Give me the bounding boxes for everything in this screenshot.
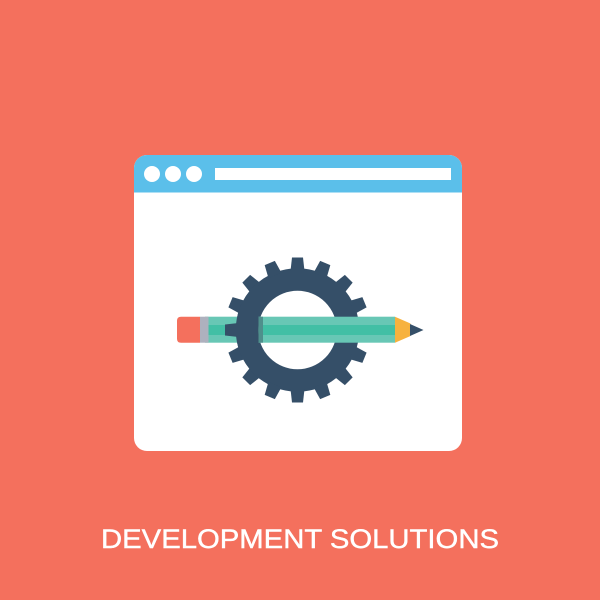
infographic illustration — [103, 155, 498, 548]
panel: browser window — [134, 155, 462, 451]
pencil wood tip — [395, 317, 410, 343]
pencil body — [205, 317, 395, 343]
address bar — [215, 168, 451, 180]
icon: pencil — [177, 317, 424, 343]
gear shadow on pencil — [258, 317, 263, 343]
pencil lead tip — [410, 324, 424, 336]
pencil ferrule — [200, 317, 208, 343]
icon: gear — [225, 258, 370, 402]
pencil eraser — [177, 317, 200, 343]
icon: gear with pencil — [177, 258, 424, 402]
window header bar — [134, 155, 462, 192]
icon: window control dots — [144, 166, 202, 182]
gear left half over pencil — [225, 291, 258, 369]
window body — [134, 155, 462, 451]
title: DEVELOPMENT SOLUTIONS — [101, 524, 499, 554]
pencil centre stripe — [205, 325, 395, 335]
